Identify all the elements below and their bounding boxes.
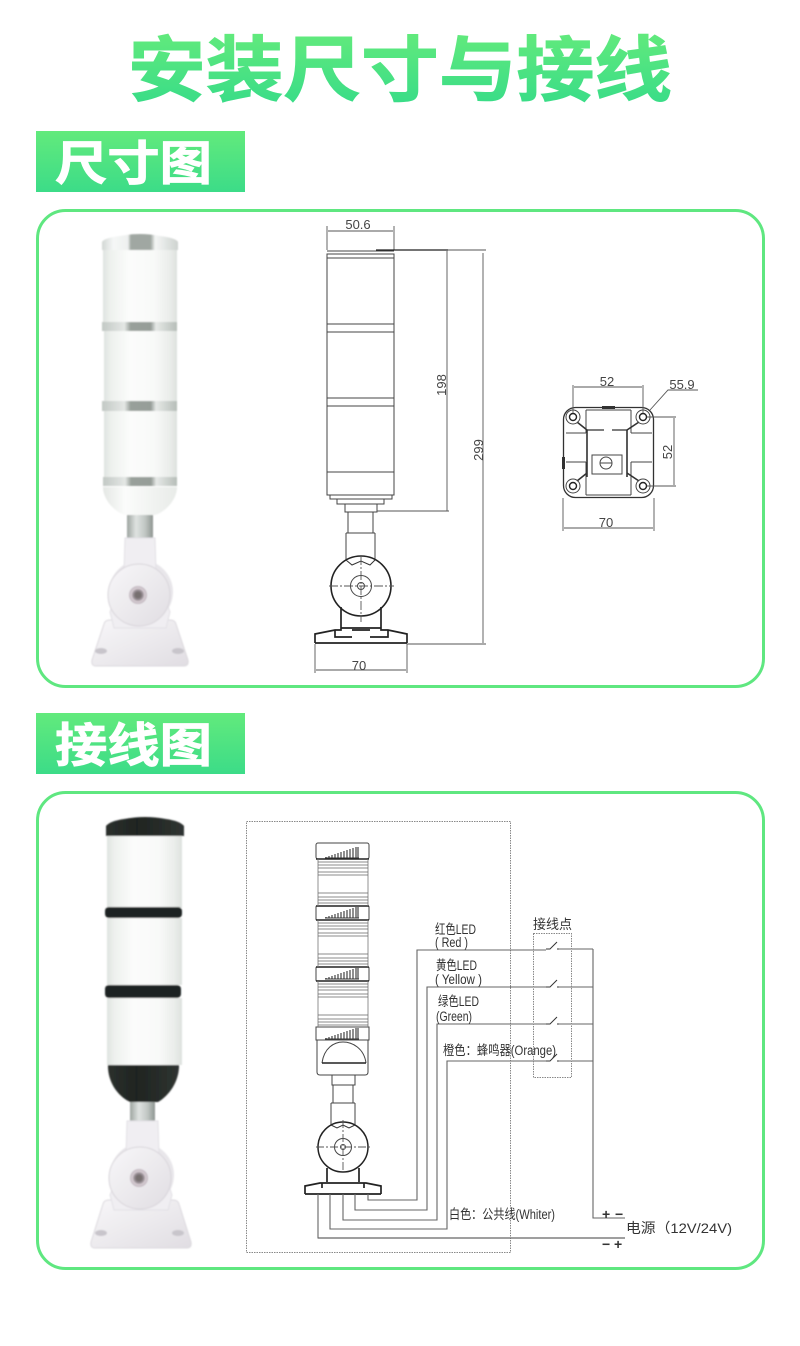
wire labels: 绿色LED bbox=[438, 993, 479, 1009]
drawing: side view with dimensions bbox=[315, 217, 486, 673]
power label and polarity: + bbox=[614, 1236, 622, 1252]
title: 安装尺寸与接线 bbox=[128, 14, 672, 116]
power label and polarity bbox=[602, 1206, 732, 1252]
drawing: stack light schematic bbox=[305, 843, 381, 1194]
drawing: side view with dimensions: 198 bbox=[434, 374, 449, 396]
drawing: dotted enclosure bbox=[246, 822, 510, 1252]
photo: silver stack light bbox=[92, 234, 188, 666]
power label and polarity: − bbox=[602, 1236, 610, 1252]
drawing: base plate top view with dimensions: 70 bbox=[599, 515, 613, 530]
wire labels: 白色：公共线(Whiter) bbox=[449, 1206, 555, 1222]
wire labels: 红色LED bbox=[435, 921, 476, 937]
drawing: base plate top view with dimensions bbox=[562, 374, 698, 531]
drawing: base plate top view with dimensions: 52 bbox=[660, 445, 675, 459]
wire labels: 黄色LED bbox=[436, 957, 477, 973]
drawing: side view with dimensions: 70 bbox=[352, 658, 366, 673]
panel: dimension drawing bbox=[38, 210, 764, 686]
heading: dimension drawing: 尺寸图 bbox=[55, 125, 212, 194]
wiring lines bbox=[318, 949, 625, 1238]
drawing: base plate top view with dimensions: 55.9 bbox=[669, 377, 695, 392]
power label and polarity: + bbox=[602, 1206, 610, 1222]
photo: black stack light bbox=[91, 817, 191, 1248]
heading: wiring diagram: 接线图 bbox=[55, 707, 212, 776]
heading: wiring diagram bbox=[36, 707, 245, 776]
panel: wiring diagram bbox=[38, 792, 764, 1268]
wire labels: ( Yellow ) bbox=[435, 972, 482, 987]
power label and polarity: 电源（12V/24V) bbox=[626, 1220, 732, 1236]
wire labels: ( Red ) bbox=[435, 935, 468, 950]
wire labels: 橙色：蜂鸣器(Orange) bbox=[443, 1042, 556, 1058]
switch contact box bbox=[533, 913, 572, 1078]
wire labels: (Green) bbox=[436, 1009, 472, 1024]
switch contact box: 接线点 bbox=[533, 913, 572, 933]
wire labels bbox=[435, 921, 556, 1222]
drawing: side view with dimensions: 299 bbox=[471, 439, 486, 461]
drawing: side view with dimensions: 50.6 bbox=[345, 217, 371, 232]
heading: dimension drawing bbox=[36, 125, 245, 194]
power label and polarity: − bbox=[615, 1206, 623, 1222]
drawing: base plate top view with dimensions: 52 bbox=[600, 374, 614, 389]
